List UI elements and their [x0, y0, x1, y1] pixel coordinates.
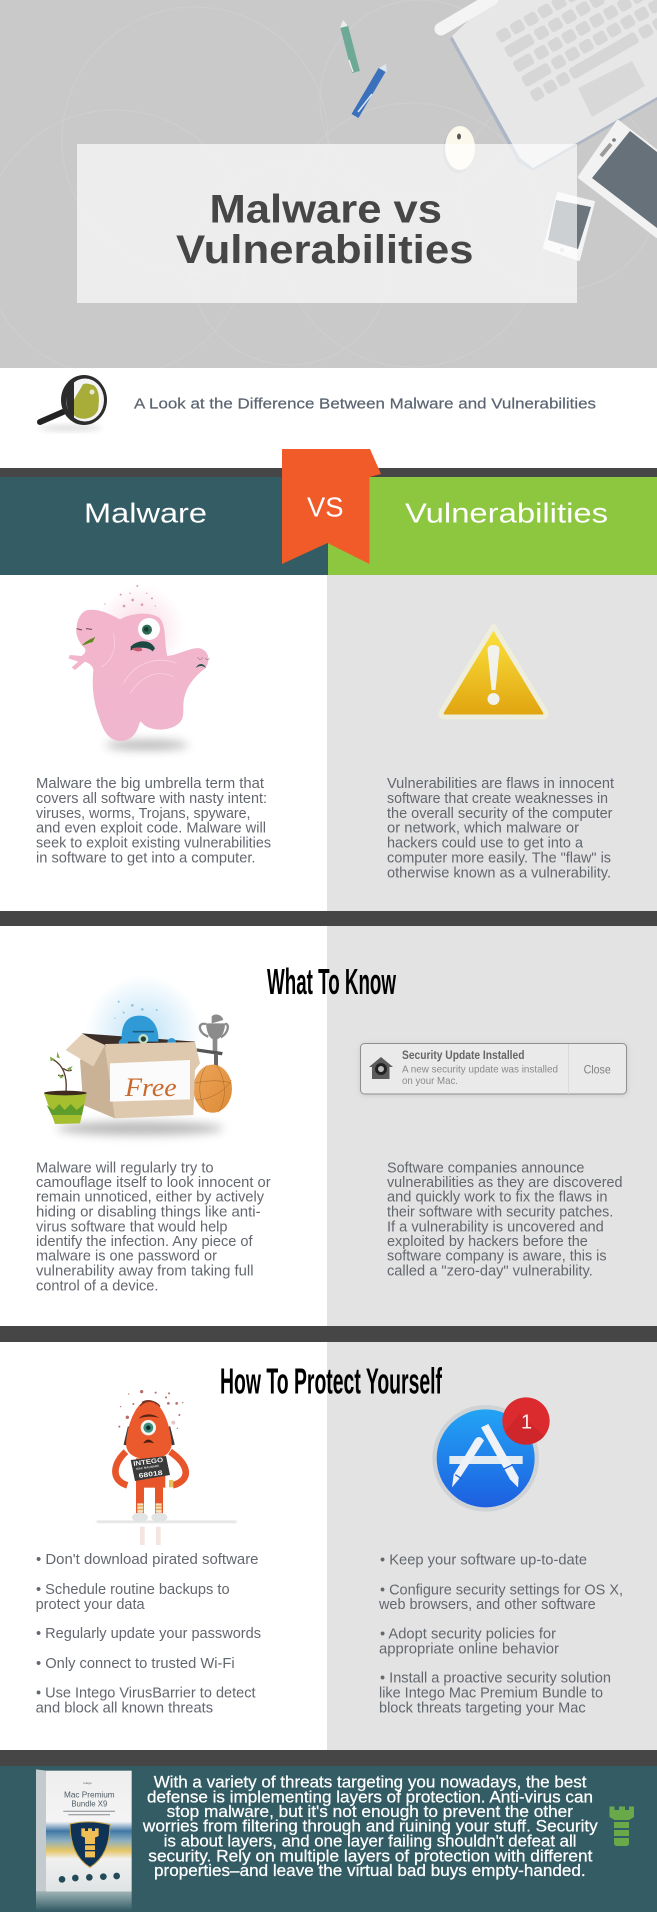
product box: Mac Premium: [64, 1790, 115, 1799]
malware description: [36, 776, 271, 866]
what to know malware text: camouflage itself to look innocent or: [36, 1175, 271, 1191]
icon: green pen: [340, 20, 356, 72]
what to know vulnerabilities text: exploited by hackers before the: [387, 1234, 588, 1250]
laptop touchpad: [578, 61, 645, 117]
protect list: malware: protect your data: [36, 1597, 145, 1613]
title: Malware vs: [210, 188, 442, 232]
mugshot sign: [131, 1456, 170, 1481]
what to know malware text: hiding or disabling things like anti-: [36, 1205, 261, 1221]
mugshot sign: MAC MALWARE: [136, 1464, 160, 1471]
protect list: vulnerabilities: appropriate online behavior: [379, 1641, 559, 1657]
icon: green tower: [610, 1806, 634, 1846]
malware description: seek to exploit existing vulnerabilities: [36, 836, 271, 852]
panel: malware definition: [0, 575, 327, 911]
protect list: vulnerabilities: [378, 1552, 623, 1716]
malware description: viruses, worms, Trojans, spyware,: [36, 806, 250, 822]
protect list: vulnerabilities: • Configure security settings for OS X,: [380, 1582, 623, 1598]
footer message: defense is implementing layers of protection. Anti-virus can: [147, 1787, 593, 1806]
protect list: vulnerabilities: block threats targeting your Mac: [379, 1700, 586, 1716]
footer message: worries from filtering through and ruining your stuff. Security: [142, 1817, 598, 1836]
protect list: vulnerabilities: web browsers, and other software: [378, 1597, 596, 1613]
what to know malware text: [36, 1160, 271, 1294]
divider band: [0, 1750, 657, 1766]
divider band: [0, 1326, 657, 1342]
heading: Malware: Malware: [84, 498, 207, 529]
heading: How To Protect Yourself: How To Protect Yourself: [220, 1361, 443, 1402]
VS ribbon: [282, 449, 381, 564]
what to know vulnerabilities text: If a vulnerability is uncovered and: [387, 1219, 604, 1235]
what to know vulnerabilities text: [387, 1160, 622, 1280]
what to know malware text: identify the infection. Any piece of: [36, 1234, 254, 1250]
trophy: [197, 1014, 228, 1067]
what to know vulnerabilities text: their software with security patches.: [387, 1205, 613, 1221]
icon: app store badge: 1: [521, 1412, 532, 1434]
protect list: vulnerabilities: like Intego Mac Premium Bundle to: [379, 1686, 603, 1702]
vulnerabilities description: the overall security of the computer: [387, 806, 613, 822]
what to know malware text: malware is one password or: [36, 1249, 217, 1265]
protect list: malware: • Only connect to trusted Wi-Fi: [36, 1656, 235, 1672]
protect list: malware: • Use Intego VirusBarrier to detect: [36, 1686, 256, 1702]
protect list: malware: and block all known threats: [36, 1700, 213, 1716]
notification: security update: Security Update Installed: [402, 1050, 524, 1062]
title: Vulnerabilities: [176, 228, 474, 272]
icon: mouse: [443, 126, 475, 173]
protect list: malware: • Don't download pirated software: [36, 1552, 258, 1568]
panel: what to know: [36, 926, 657, 1326]
what to know vulnerabilities text: Software companies announce: [387, 1160, 584, 1176]
product box: [36, 1769, 132, 1911]
comparison header band: [0, 449, 657, 575]
VS ribbon: VS: [307, 492, 344, 523]
plant pot: [44, 1052, 87, 1124]
vulnerabilities description: Vulnerabilities are flaws in innocent: [387, 776, 614, 792]
what to know vulnerabilities text: and quickly work to fix the flaws in: [387, 1190, 608, 1206]
what to know malware text: remain unnoticed, either by actively: [36, 1190, 265, 1206]
malware description: Malware the big umbrella term that: [36, 776, 264, 792]
footer message: [142, 1772, 598, 1880]
protect list: vulnerabilities: • Adopt security policies for: [380, 1626, 556, 1642]
icon: magnifier with frog: [38, 375, 107, 431]
panel: vulnerabilities definition: [327, 575, 657, 911]
title: [176, 188, 474, 272]
vulnerabilities description: software that create weaknesses in: [387, 791, 608, 807]
what to know malware text: Malware will regularly try to: [36, 1160, 214, 1176]
title panel: [77, 144, 577, 303]
hero: desk background: [0, 0, 657, 376]
protect list: malware: • Regularly update your passwords: [36, 1626, 261, 1642]
protect list: malware: • Schedule routine backups to: [36, 1582, 230, 1598]
vulnerabilities description: hackers could use to get into a: [387, 836, 584, 852]
icon: app store badge: [432, 1397, 550, 1512]
shield: [70, 1822, 110, 1867]
basketball: [193, 1065, 232, 1113]
malware description: in software to get into a computer.: [36, 850, 256, 866]
icon: laptop: [441, 0, 657, 171]
footer message: With a variety of threats targeting you nowadays, the best: [154, 1772, 587, 1791]
footer panel: [0, 1766, 657, 1912]
subtitle: A Look at the Difference Between Malware and Vulnerabilities: [134, 395, 596, 412]
icon: free box with blue monster: [44, 975, 232, 1135]
heading: What To Know: What To Know: [267, 961, 397, 1002]
intro strip: [0, 368, 657, 468]
footer message: security. Rely on multiple layers of protection with different: [148, 1846, 593, 1865]
product box: Intego: [83, 1781, 92, 1785]
notification: security update: A new security update was installed: [402, 1064, 558, 1076]
icon: free box with blue monster: Free: [124, 1073, 177, 1102]
icon: blue pen: [355, 64, 387, 116]
malware description: and even exploit code. Malware will: [36, 821, 266, 837]
protect list: vulnerabilities: • Install a proactive security solution: [380, 1671, 611, 1687]
mugshot sign: 68018: [138, 1470, 163, 1480]
vulnerabilities description: otherwise known as a vulnerability.: [387, 865, 611, 881]
vulnerabilities description: computer more easily. The "flaw" is: [387, 850, 611, 866]
malware description: covers all software with nasty intent:: [36, 791, 267, 807]
vulnerabilities description: or network, which malware or: [387, 821, 579, 837]
icon: pink monster: [68, 585, 209, 750]
product box: Bundle X9: [71, 1800, 108, 1809]
footer message: is about layers, and one layer failing shouldn't defeat all: [164, 1831, 577, 1850]
protect list: vulnerabilities: • Keep your software up-to-date: [380, 1552, 587, 1568]
heading: Vulnerabilities: Vulnerabilities: [405, 498, 608, 529]
what to know malware text: control of a device.: [36, 1278, 158, 1294]
what to know vulnerabilities text: vulnerabilities as they are discovered: [387, 1175, 622, 1191]
what to know malware text: virus software that would help: [36, 1219, 228, 1235]
what to know vulnerabilities text: software company is aware, this is: [387, 1249, 607, 1265]
icon: small phone: [544, 193, 594, 260]
icon: orange monster with mugshot sign: [97, 1390, 237, 1545]
mugshot sign: INTEGO: [133, 1457, 164, 1468]
what to know vulnerabilities text: called a "zero-day" vulnerability.: [387, 1264, 593, 1280]
footer message: properties–and leave the virtual bad buys empty-handed.: [154, 1861, 586, 1880]
what to know malware text: vulnerability away from taking full: [36, 1264, 254, 1280]
vulnerabilities description: [387, 776, 614, 881]
icon: warning triangle: [441, 626, 546, 717]
icon: large phone: [580, 122, 657, 236]
divider band: [0, 911, 657, 926]
icon: gatekeeper house: [369, 1057, 393, 1079]
notification: security update: on your Mac.: [402, 1075, 458, 1087]
notification: security update: Close: [584, 1062, 611, 1076]
protect list: malware: [36, 1552, 261, 1716]
footer message: stop malware, but it's not enough to prevent the other: [167, 1802, 573, 1821]
notification: security update: [360, 1044, 626, 1095]
blue monster: [119, 1016, 176, 1047]
panel: how to protect yourself: [36, 1342, 657, 1750]
